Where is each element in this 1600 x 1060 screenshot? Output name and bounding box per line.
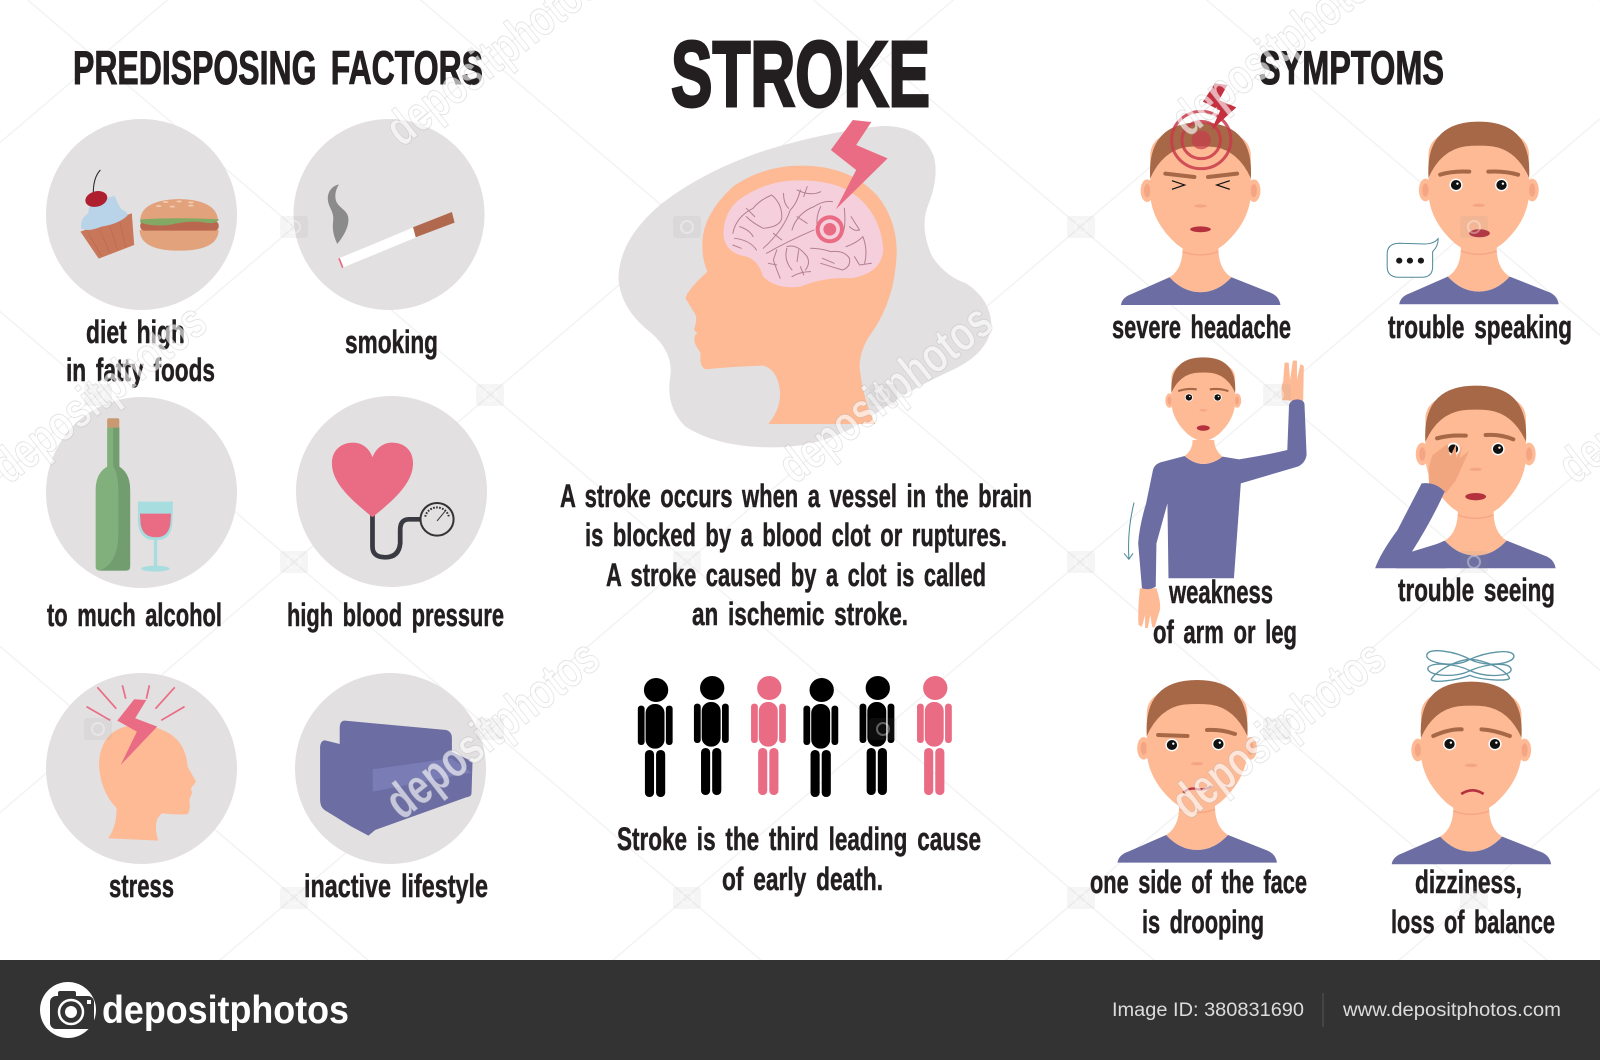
icon: depositphotos camera logo bbox=[40, 982, 96, 1038]
figure: man with speech bubble bbox=[1387, 122, 1559, 304]
panel: symptoms bbox=[1090, 41, 1572, 940]
factor: inactive lifestyle bbox=[295, 673, 488, 904]
illustration: head with brain and lightning bbox=[619, 120, 991, 447]
factor: smoking bbox=[294, 119, 484, 360]
watermarks: depositphotos bbox=[767, 293, 1003, 494]
text block: third leading cause: of early death. bbox=[722, 861, 883, 897]
label: weakness of arm or leg: weakness bbox=[1168, 574, 1273, 610]
pictogram: six people, two highlighted bbox=[638, 676, 952, 797]
label: to much alcohol: to much alcohol bbox=[47, 597, 222, 633]
label: inactive lifestyle: inactive lifestyle bbox=[304, 868, 488, 904]
heading: predisposing factors: PREDISPOSING FACTORS bbox=[73, 41, 483, 94]
logo text: depositphotos bbox=[102, 989, 349, 1032]
watermarks: depositphotos bbox=[374, 629, 610, 830]
icon: cupcake and burger bbox=[80, 170, 219, 259]
text block: definition of stroke: an ischemic stroke. bbox=[692, 596, 908, 632]
factor: high blood pressure bbox=[287, 396, 504, 633]
label: severe headache: severe headache bbox=[1112, 309, 1291, 345]
label: diet high in fatty foods: diet high bbox=[86, 314, 185, 350]
label: smoking: smoking bbox=[345, 324, 438, 360]
label: weakness of arm or leg: of arm or leg bbox=[1153, 614, 1297, 650]
text block: third leading cause: Stroke is the third leading cause bbox=[617, 821, 981, 857]
website url: www.depositphotos.com bbox=[1342, 1000, 1561, 1021]
title: stroke: STROKE bbox=[671, 22, 930, 126]
factor: stress bbox=[46, 673, 237, 904]
icon: dizziness swirl bbox=[1427, 651, 1514, 681]
icon: cigarette with smoke bbox=[328, 184, 455, 268]
symptom: one side of the face is drooping bbox=[1090, 680, 1307, 940]
factor: too much alcohol bbox=[46, 397, 237, 633]
label: diet high in fatty foods: in fatty foods bbox=[66, 352, 215, 388]
figure: man raising one arm bbox=[1124, 357, 1307, 628]
label: dizziness, loss of balance: dizziness, bbox=[1415, 864, 1522, 900]
figure: dizzy man bbox=[1392, 651, 1551, 864]
symptom: trouble seeing bbox=[1375, 386, 1556, 608]
footer bar bbox=[0, 960, 1600, 1060]
icon: sofa bbox=[320, 721, 473, 836]
label: high blood pressure: high blood pressure bbox=[287, 597, 504, 633]
icon: wine bottle and glass bbox=[96, 418, 173, 572]
icon: speech bubble bbox=[1387, 239, 1438, 277]
heading: symptoms: SYMPTOMS bbox=[1259, 41, 1444, 94]
text block: definition of stroke: A stroke caused by a clot is called bbox=[606, 557, 986, 593]
arrow: arm falling bbox=[1124, 503, 1134, 559]
figure: man with drooping face bbox=[1118, 680, 1277, 863]
label: one side of the face is drooping: one side of the face bbox=[1090, 864, 1307, 900]
image id: Image ID: 380831690 bbox=[1112, 1000, 1304, 1021]
label: stress: stress bbox=[109, 868, 174, 904]
factor: diet high in fatty foods bbox=[46, 119, 237, 388]
panel: stroke overview bbox=[560, 22, 1046, 897]
watermarks: depositphotos bbox=[1160, 629, 1396, 830]
figure: man with headache bbox=[1121, 83, 1280, 305]
symptom: severe headache bbox=[1112, 83, 1291, 345]
symptom: dizziness, loss of balance bbox=[1391, 651, 1555, 940]
figure: man covering one eye bbox=[1375, 386, 1556, 568]
text block: definition of stroke: is blocked by a blood clot or ruptures. bbox=[585, 517, 1007, 553]
icon: head with lightning bbox=[87, 685, 196, 841]
symptom: weakness of arm or leg bbox=[1124, 357, 1307, 650]
icon: heart with pressure gauge bbox=[332, 443, 454, 557]
panel: predisposing factors bbox=[46, 41, 504, 904]
symptom: trouble speaking bbox=[1387, 122, 1572, 345]
label: one side of the face is drooping: is drooping bbox=[1142, 904, 1264, 940]
hand over eye bbox=[1429, 444, 1469, 493]
text block: definition of stroke: A stroke occurs when a vessel in the brain bbox=[560, 478, 1032, 514]
